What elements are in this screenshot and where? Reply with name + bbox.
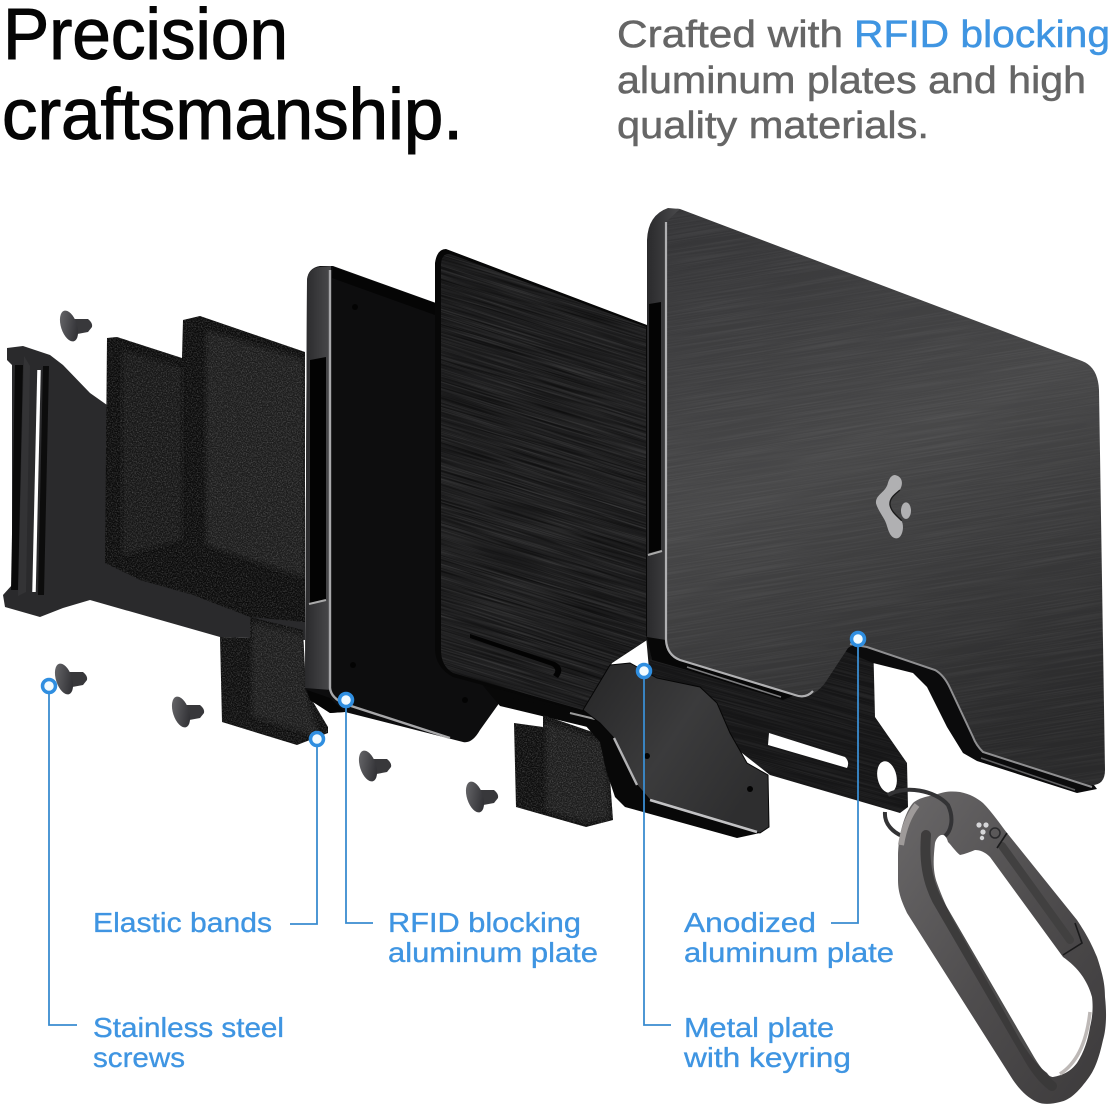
- screw 3: [168, 694, 204, 730]
- carabiner keyring: [885, 790, 1106, 1104]
- metal bracket back plate: [3, 346, 305, 640]
- screws: [51, 308, 498, 815]
- split ring upper: [888, 790, 951, 836]
- keyring slot: [768, 733, 848, 768]
- callout: metal plate with keyring: [638, 664, 851, 1073]
- plate top surface: [665, 209, 1105, 785]
- anodized aluminum plate: [647, 208, 1105, 793]
- callout: metal plate with keyring: with keyring: [683, 1042, 851, 1073]
- callout: stainless steel screws: screws: [93, 1042, 185, 1073]
- callout: anodized aluminum plate: aluminum plate: [684, 937, 894, 968]
- subtitle: quality materials.: [617, 105, 929, 147]
- connector behind middle plate: [470, 670, 600, 730]
- split ring lower: [885, 812, 902, 836]
- subtitle: aluminum plates and high: [617, 60, 1086, 102]
- subtitle: RFID blocking: [854, 14, 1110, 56]
- elastic band upper: [100, 310, 310, 625]
- callout: anodized aluminum plate: [684, 632, 894, 968]
- callout: metal plate with keyring: Metal plate: [684, 1012, 834, 1043]
- callout: RFID blocking aluminum plate: aluminum plate: [388, 937, 598, 968]
- matte plate section: [583, 663, 769, 833]
- exploded wallet illustration: [3, 208, 1106, 1104]
- callout: RFID blocking aluminum plate: RFID blocking: [388, 907, 581, 938]
- metal highlights: [1060, 1012, 1090, 1074]
- screw 2: [51, 661, 87, 697]
- elastic band lower: [220, 618, 328, 745]
- logo: [876, 475, 911, 538]
- screw 4: [355, 748, 391, 784]
- brushed keyring section: [646, 636, 908, 813]
- RFID blocking aluminum plate: [305, 266, 600, 742]
- card slot mark: [470, 634, 561, 678]
- side frame: [647, 208, 680, 640]
- callout: elastic bands: Elastic bands: [93, 907, 272, 938]
- callout: stainless steel screws: Stainless steel: [93, 1012, 284, 1043]
- title: [2, 0, 463, 155]
- inner facet: [925, 835, 1052, 1086]
- middle brushed plate: [435, 249, 647, 710]
- callout: stainless steel screws: [42, 680, 284, 1073]
- screw 1: [56, 308, 92, 344]
- elastic band front: [514, 716, 613, 827]
- callout: RFID blocking aluminum plate: [340, 694, 598, 968]
- metal plate with keyring: [570, 636, 908, 838]
- keyring hole: [874, 759, 900, 795]
- subtitle: [617, 14, 1110, 147]
- underside connector: [500, 696, 760, 838]
- screw 5: [462, 779, 498, 815]
- callout: anodized aluminum plate: Anodized: [684, 907, 816, 938]
- carabiner body: [898, 791, 1106, 1104]
- carabiner logo: [976, 822, 1000, 840]
- title: craftsmanship.: [2, 75, 463, 155]
- subtitle: Crafted with: [617, 14, 843, 56]
- gate joints: [997, 833, 1082, 955]
- fabric texture: [100, 310, 310, 625]
- callout: elastic bands: [93, 732, 324, 938]
- plate edge thickness: [647, 635, 800, 700]
